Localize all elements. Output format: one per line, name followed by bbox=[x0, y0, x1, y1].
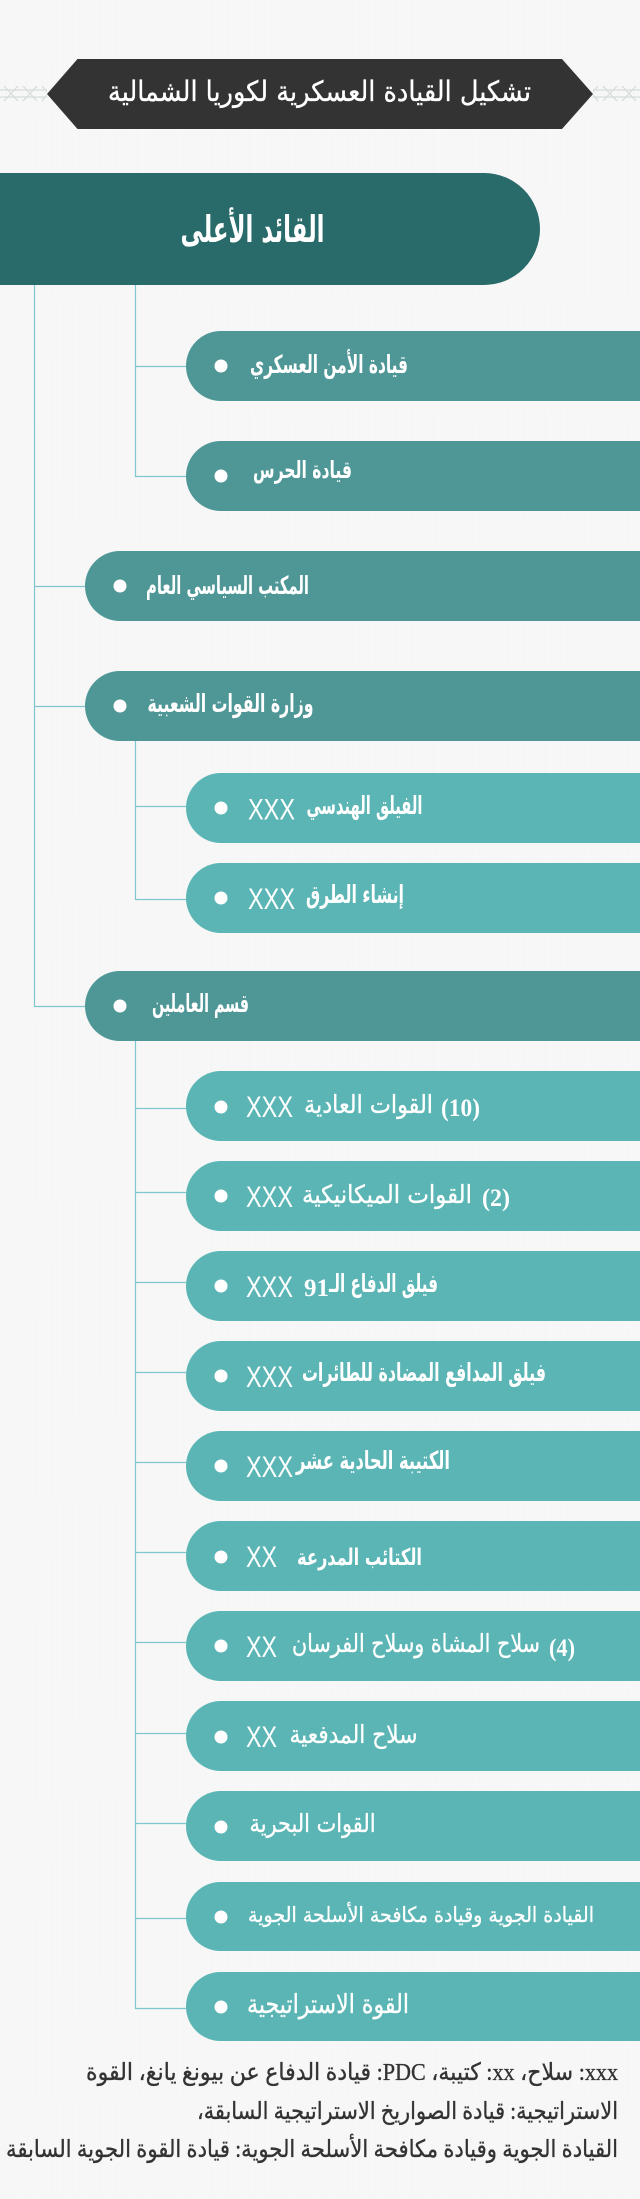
node: eleventh brigade: الكتيبة الحادية عشر bbox=[295, 1446, 450, 1476]
node: infantry and cavalry: (4) bbox=[549, 1635, 575, 1662]
node: road construction: XXX bbox=[248, 883, 295, 916]
footnote legend bbox=[6, 2060, 618, 2163]
node: military security command bbox=[186, 331, 640, 401]
node: guard command: قيادة الحرس bbox=[253, 456, 352, 484]
node: armored brigades: الكتائب المدرعة bbox=[297, 1545, 422, 1571]
panel: supreme commander bbox=[0, 173, 540, 285]
node: road construction bbox=[186, 863, 640, 933]
node: mechanized forces bbox=[186, 1161, 640, 1231]
node: mechanized forces: (2) bbox=[482, 1185, 510, 1212]
heading: supreme commander: القائد الأعلى bbox=[180, 206, 324, 251]
node: eleventh brigade bbox=[186, 1431, 640, 1501]
node: engineering corps bbox=[186, 773, 640, 843]
node: 91st defense corps: 91 bbox=[304, 1275, 329, 1302]
node: armored brigades: XX bbox=[246, 1541, 277, 1574]
node: air and air defense command: القيادة الجوية وقيادة مكافحة الأسلحة الجوية bbox=[248, 1902, 594, 1927]
node: armored brigades bbox=[186, 1521, 640, 1591]
node: road construction: إنشاء الطرق bbox=[306, 880, 404, 910]
footnote legend: xxx: سلاح، xx: كتيبة، PDC: قيادة الدفاع عن بيونغ يانغ، القوة bbox=[86, 2060, 618, 2086]
node: regular forces bbox=[186, 1071, 640, 1141]
node: strategic force bbox=[186, 1972, 640, 2041]
node: guard command bbox=[186, 441, 640, 511]
node: artillery: سلاح المدفعية bbox=[290, 1720, 418, 1749]
node: navy bbox=[186, 1791, 640, 1861]
node: artillery: XX bbox=[246, 1721, 277, 1754]
node: anti-aircraft artillery corps bbox=[186, 1341, 640, 1411]
connector lines bbox=[34, 285, 186, 2008]
node: eleventh brigade: XXX bbox=[246, 1451, 293, 1484]
node: general political bureau: المكتب السياسي العام bbox=[146, 571, 309, 600]
node: engineering corps: XXX bbox=[248, 794, 295, 826]
node: infantry and cavalry bbox=[186, 1611, 640, 1681]
node: ministry of people's armed forces bbox=[85, 671, 640, 741]
node: military security command: قيادة الأمن العسكري bbox=[250, 349, 408, 380]
node: navy: القوات البحرية bbox=[250, 1809, 376, 1838]
node: infantry and cavalry: سلاح المشاة وسلاح الفرسان bbox=[292, 1629, 540, 1659]
node: 91st defense corps: XXX bbox=[246, 1271, 293, 1304]
node: regular forces: XXX bbox=[246, 1091, 293, 1124]
node: 91st defense corps bbox=[186, 1251, 640, 1321]
title banner bbox=[47, 59, 593, 129]
node: mechanized forces: XXX bbox=[246, 1181, 293, 1214]
node: 91st defense corps: فيلق الدفاع الـ bbox=[328, 1269, 438, 1299]
node: anti-aircraft artillery corps: XXX bbox=[246, 1361, 293, 1394]
node: ministry of people's armed forces: وزارة القوات الشعبية bbox=[148, 689, 314, 719]
node: regular forces: القوات العادية bbox=[304, 1090, 433, 1119]
node: strategic force: القوة الاستراتيجية bbox=[247, 1990, 409, 2020]
node: general staff department: قسم العاملين bbox=[152, 989, 249, 1019]
node: regular forces: (10) bbox=[441, 1095, 480, 1122]
node: general political bureau bbox=[85, 551, 640, 621]
node: engineering corps: الفيلق الهندسي bbox=[306, 791, 422, 821]
node: mechanized forces: القوات الميكانيكية bbox=[302, 1180, 472, 1209]
node: infantry and cavalry: XX bbox=[246, 1631, 277, 1664]
node: general staff department bbox=[85, 971, 640, 1041]
node: artillery bbox=[186, 1701, 640, 1771]
title text: تشكيل القيادة العسكرية لكوريا الشمالية bbox=[108, 75, 531, 108]
node: air and air defense command bbox=[186, 1882, 640, 1951]
